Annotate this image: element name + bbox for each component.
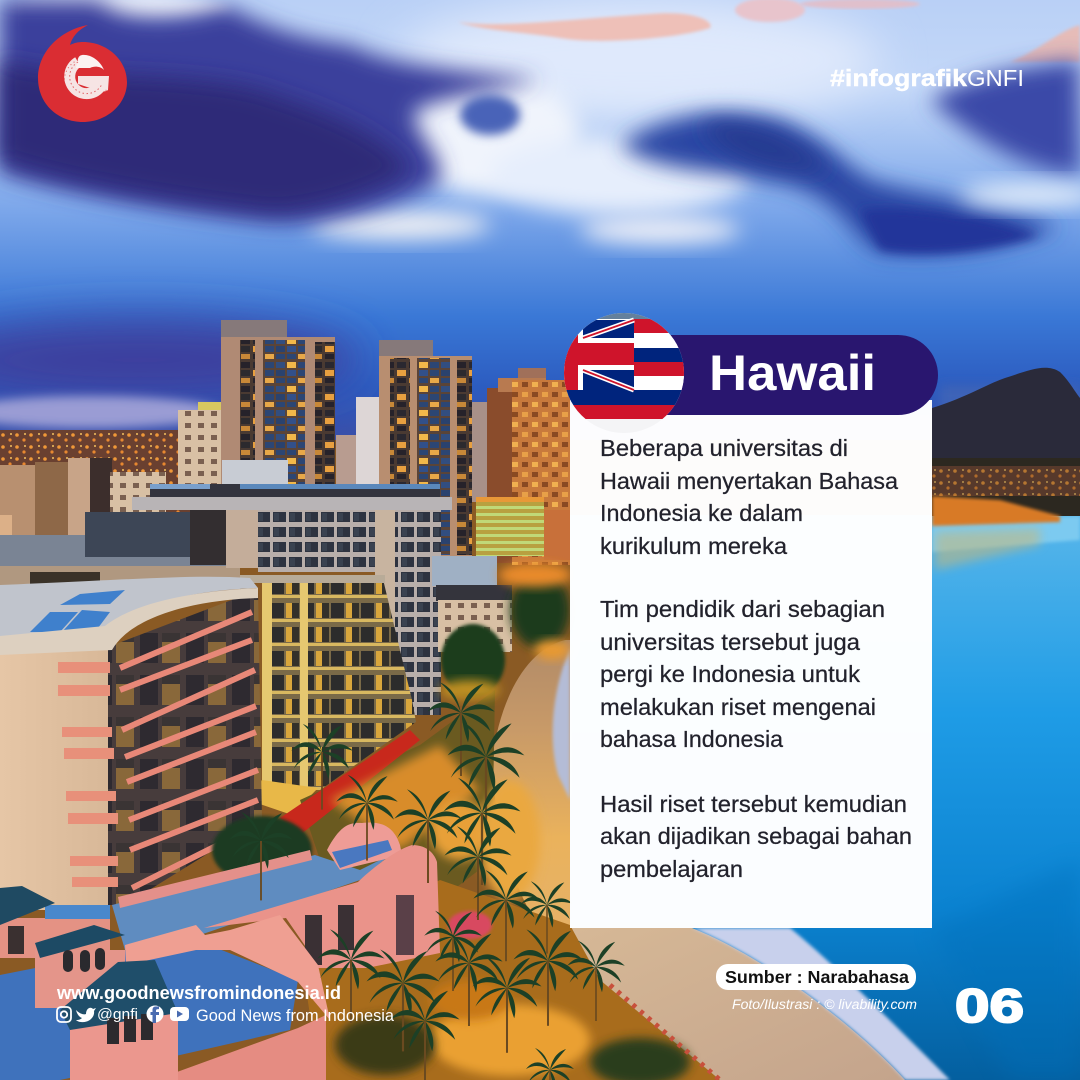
stepped parapet [125, 915, 330, 1020]
gardens and glow [212, 563, 571, 900]
tower: twin A [221, 320, 335, 487]
tower: twin B [379, 340, 472, 556]
paragraph 1: Hawaii menyertakan Bahasa [600, 468, 898, 494]
ocean [570, 515, 1080, 1080]
title pill [600, 335, 938, 415]
main facade [118, 822, 440, 968]
paragraph 2 [600, 596, 885, 752]
icon: instagram [57, 1007, 71, 1022]
photo credit: Foto/Ilustrasi : © livability.com [732, 997, 917, 1012]
distant city lights across the bay [932, 458, 1080, 526]
paragraph 1: kurikulum mereka [600, 533, 787, 559]
paragraph 1: Beberapa universitas di [600, 435, 848, 461]
logo: white G eagle mark [64, 55, 109, 102]
palm trees and lights [229, 682, 625, 1080]
front pavilion [60, 960, 178, 1080]
distant skyline left [0, 430, 190, 550]
sand below the card [570, 928, 905, 1080]
paragraph 2: Tim pendidik dari sebagian [600, 596, 885, 622]
white text card [570, 400, 932, 928]
hashtag: GNFI [967, 65, 1024, 91]
surf line [692, 928, 950, 1080]
paragraph 2: bahasa Indonesia [600, 726, 783, 752]
pink hotel [0, 822, 440, 1080]
page number: 06 [955, 979, 1024, 1032]
lower roof [0, 940, 298, 1080]
front right wing [155, 1015, 326, 1080]
shallow water sliver beside the card [553, 648, 570, 800]
icon: facebook [146, 1006, 164, 1023]
hashtag [830, 65, 1024, 91]
beachfront hotel [0, 460, 512, 720]
logo: GNFI red emblem [38, 25, 127, 122]
icon: Hawaii flag in circle [564, 313, 684, 419]
mid-rise building with lit windows [240, 575, 416, 815]
paragraph 1 [600, 435, 898, 559]
title: Hawaii: Hawaii [709, 345, 876, 401]
sky with clouds [0, 0, 1080, 440]
mountain: Diamond Head [932, 368, 1080, 470]
channel name: Good News from Indonesia [196, 1007, 395, 1025]
paragraph 2: pergi ke Indonesia untuk [600, 661, 861, 687]
body text [600, 435, 912, 882]
footer website: www.goodnewsfromindonesia.id [56, 982, 341, 1003]
beach sand [492, 640, 690, 1000]
source badge [716, 964, 916, 990]
icon: twitter [76, 1008, 96, 1022]
source badge: Sumber : Narabahasa [725, 967, 909, 987]
back pavilion [0, 886, 110, 958]
main flat roof [112, 855, 390, 950]
high-rise towers [178, 320, 570, 565]
paragraph 3 [600, 791, 912, 882]
tower: orange [476, 368, 570, 565]
paragraph 1: Indonesia ke dalam [600, 500, 803, 526]
curved resort tower [0, 577, 262, 910]
paragraph 3: pembelajaran [600, 856, 743, 882]
paragraph 3: akan dijadikan sebagai bahan [600, 823, 912, 849]
foreground garden [300, 780, 720, 1080]
tower: left short [178, 402, 223, 485]
hashtag: #infografik [830, 65, 967, 91]
paragraph 2: melakukan riset mengenai [600, 694, 876, 720]
paragraph 3: Hasil riset tersebut kemudian [600, 791, 907, 817]
mid pavilion [35, 925, 125, 1008]
paragraph 2: universitas tersebut juga [600, 629, 860, 655]
ground base [0, 430, 1080, 1080]
handle: @gnfi [97, 1006, 138, 1023]
icon: youtube [170, 1007, 189, 1021]
footer social row [57, 1006, 395, 1025]
